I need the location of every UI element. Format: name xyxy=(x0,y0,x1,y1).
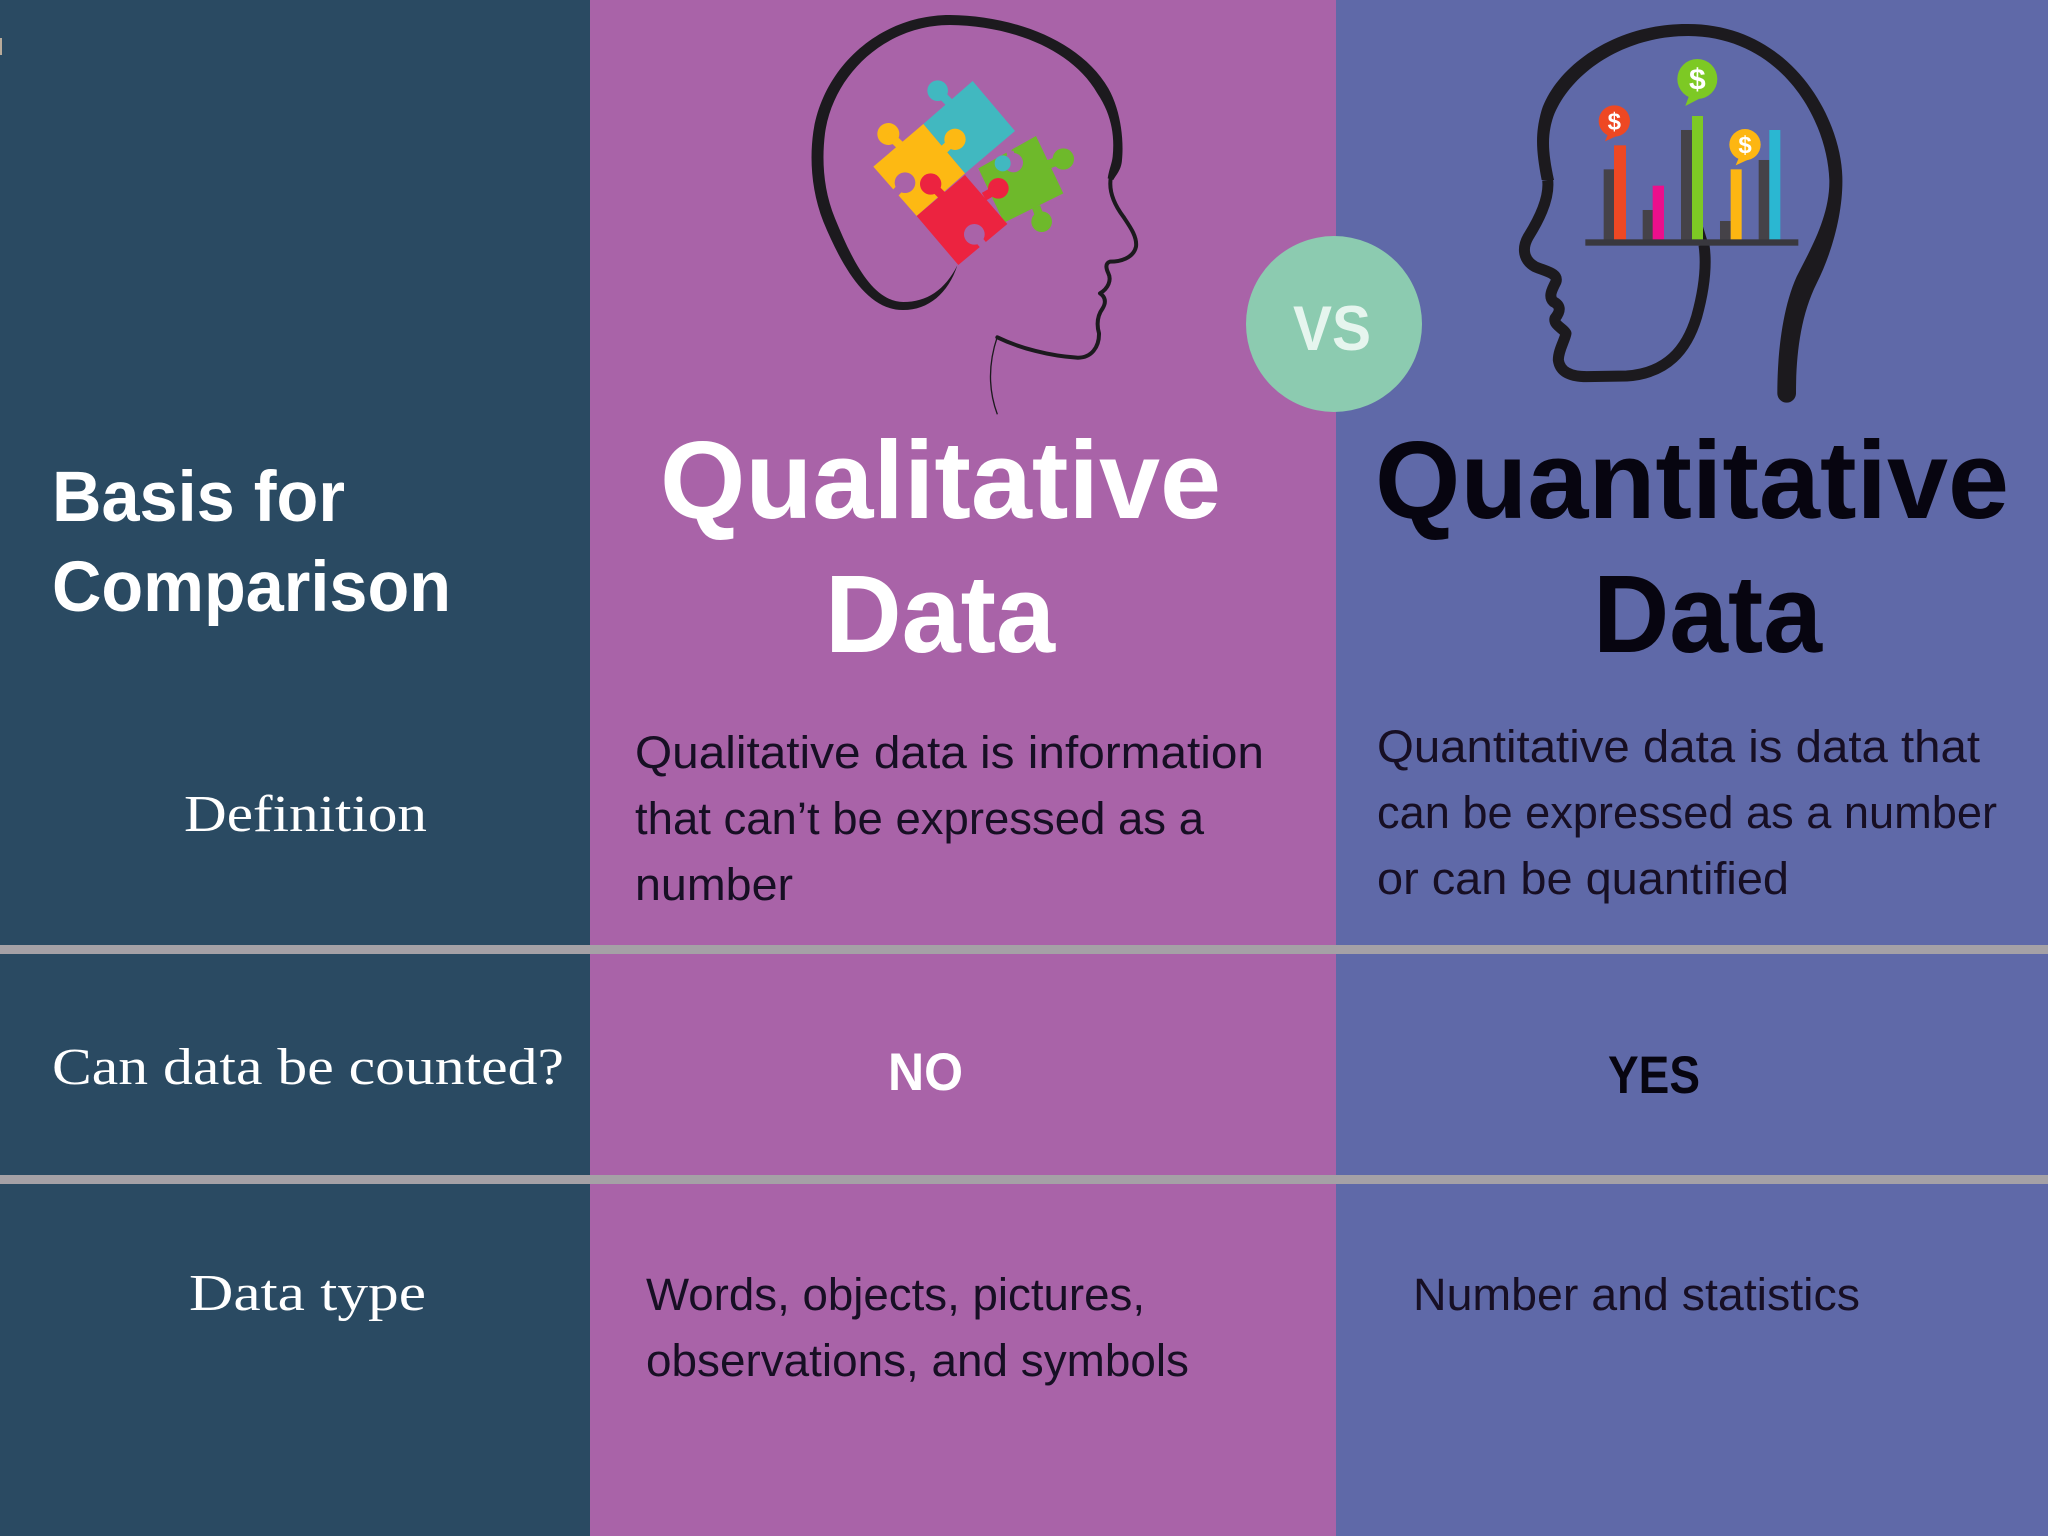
icon: red dollar bubble xyxy=(1599,105,1630,141)
heading: basis for comparison: Comparison xyxy=(52,548,451,627)
text: quantitative definition xyxy=(1377,721,1997,904)
text: quantitative data types: Number and statistics xyxy=(1413,1269,1860,1320)
bar chart xyxy=(1585,116,1798,246)
panel: comparison labels column xyxy=(0,0,590,1536)
puzzle piece: green xyxy=(978,136,1074,232)
icon: VS badge xyxy=(1246,236,1422,412)
puzzle piece: red xyxy=(917,173,1009,265)
text: quantitative definition: or can be quantified xyxy=(1377,853,1789,904)
puzzle piece: yellow xyxy=(873,123,966,216)
heading: qualitative data: Qualitative xyxy=(660,419,1221,542)
panel: qualitative column xyxy=(590,0,1336,1536)
heading: basis for comparison: Basis for xyxy=(52,458,345,537)
icon: head with puzzle pieces xyxy=(812,15,1136,414)
heading: quantitative data: Quantitative xyxy=(1375,419,2009,542)
icon: green dollar bubble: $ xyxy=(1689,63,1706,96)
text: qualitative data types: observations, and symbols xyxy=(646,1335,1189,1386)
heading: quantitative data: Data xyxy=(1593,553,1823,676)
icon: yellow dollar bubble: $ xyxy=(1738,132,1752,159)
text: qualitative definition: Qualitative data is information xyxy=(635,727,1264,778)
puzzle piece: teal xyxy=(923,80,1015,173)
text: qualitative data types xyxy=(646,1269,1189,1386)
heading: qualitative data xyxy=(660,419,1221,676)
text: qualitative definition: number xyxy=(635,859,793,910)
text: NO: NO xyxy=(888,1043,963,1102)
text: quantitative definition: Quantitative data is data that xyxy=(1377,721,1981,772)
text: qualitative definition xyxy=(635,727,1264,910)
row label: data type: Data type xyxy=(189,1265,426,1322)
icon: yellow dollar bubble xyxy=(1729,129,1761,165)
text: YES: YES xyxy=(1608,1046,1700,1105)
heading: basis for comparison xyxy=(52,458,451,627)
text: qualitative data types: Words, objects, pictures, xyxy=(646,1269,1145,1320)
row label: definition: Definition xyxy=(184,786,427,843)
panel: quantitative column xyxy=(1336,0,2048,1536)
row label: can data be counted: Can data be counted? xyxy=(52,1039,564,1096)
text: qualitative definition: that can’t be expressed as a xyxy=(635,793,1205,844)
icon: red dollar bubble: $ xyxy=(1608,108,1621,135)
heading: qualitative data: Data xyxy=(825,553,1056,676)
text: quantitative definition: can be expressed as a number xyxy=(1377,787,1997,838)
heading: quantitative data xyxy=(1375,419,2009,676)
icon: head with bar chart xyxy=(1524,24,1842,403)
icon: green dollar bubble xyxy=(1677,59,1717,106)
icon: VS badge: VS xyxy=(1293,294,1371,364)
